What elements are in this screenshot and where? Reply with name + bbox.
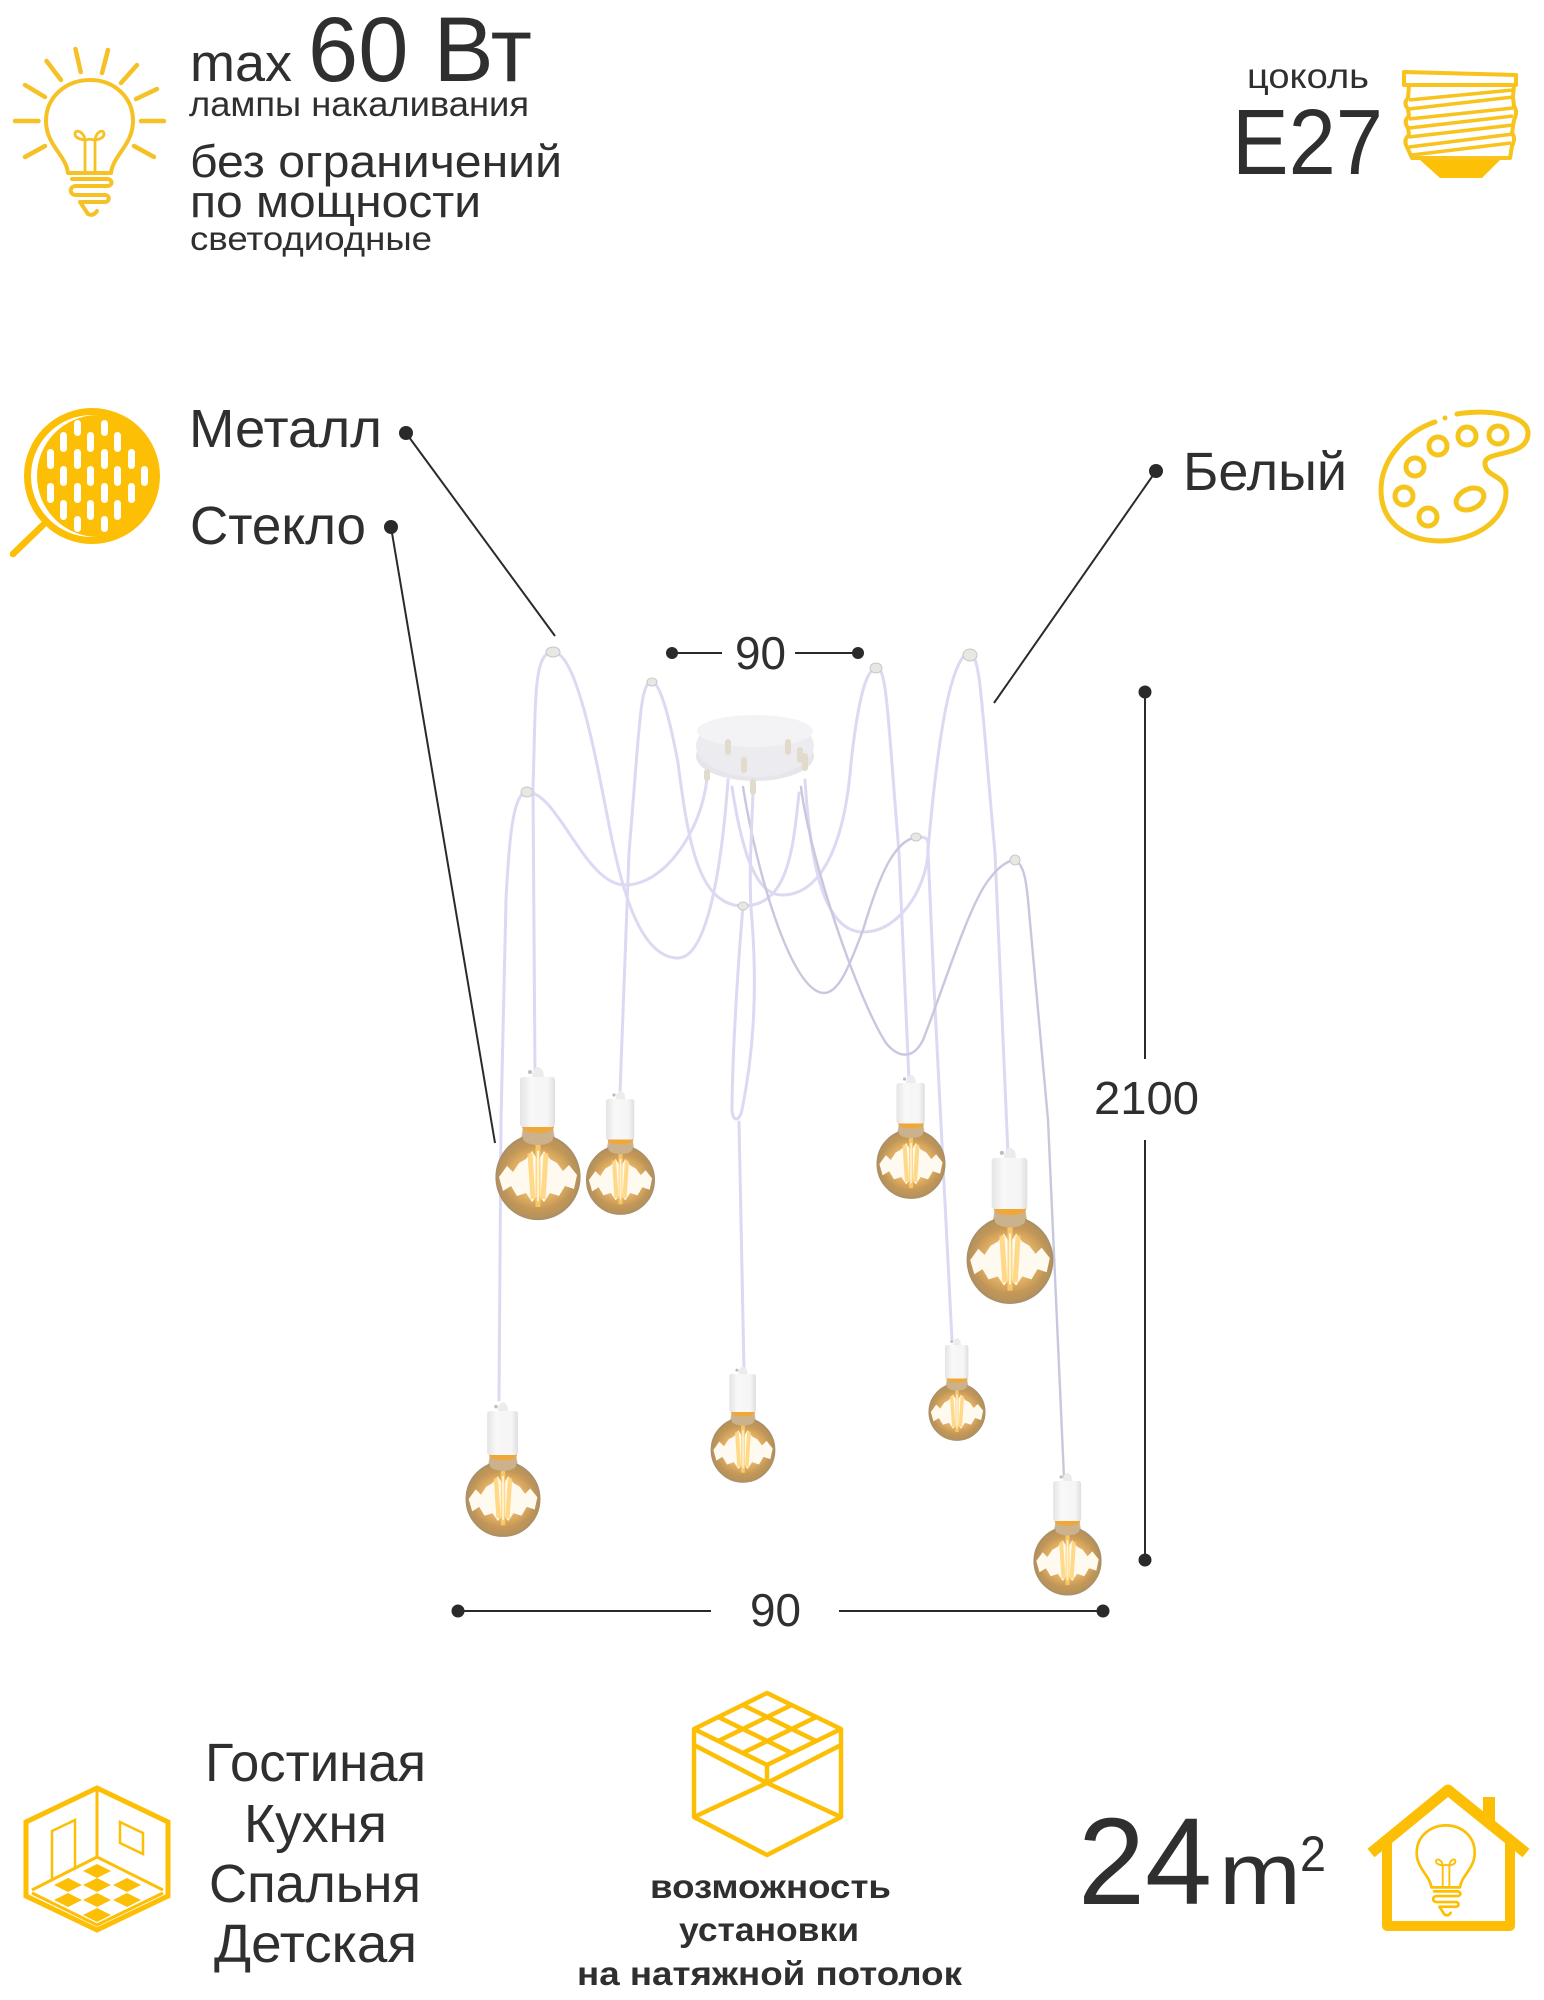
hooks <box>521 647 1020 910</box>
note line 1: возможность <box>650 1868 891 1905</box>
note line 3: на натяжной потолок <box>577 1955 963 1992</box>
socket type: E27 <box>1232 90 1383 194</box>
room: nursery: Детская <box>214 1914 417 1974</box>
leader: glass <box>384 520 495 1143</box>
icon: metal texture under magnifier <box>13 412 159 554</box>
stretch ceiling note <box>577 1868 963 1992</box>
max wattage: 60 Вт <box>308 0 532 101</box>
label: metal: Металл <box>189 399 382 459</box>
heading: power limits <box>189 0 562 257</box>
lamp 3 <box>877 1075 945 1198</box>
area value <box>1078 1794 1326 1931</box>
icon: stretch ceiling box <box>694 1693 841 1855</box>
rooms list <box>205 1733 426 1974</box>
area number: 24 <box>1078 1794 1212 1931</box>
note line 2: установки <box>679 1911 859 1948</box>
max label: max <box>190 34 292 93</box>
dimension: width <box>452 1584 1110 1636</box>
label: white: Белый <box>1183 442 1347 502</box>
dimension: width: 90 <box>750 1584 801 1636</box>
label: glass: Стекло <box>190 496 366 556</box>
area unit: m <box>1219 1824 1301 1923</box>
leader: white <box>994 464 1163 703</box>
icon: house with bulb <box>1371 1790 1526 1926</box>
canopy <box>696 715 814 792</box>
icon: light bulb with rays <box>15 49 164 215</box>
icon: isometric room <box>26 1788 168 1930</box>
lamp 5 <box>466 1402 540 1536</box>
icon: E27 screw base <box>1404 72 1516 178</box>
dimension: height: 2100 <box>1094 1072 1199 1124</box>
dimension: height <box>1094 686 1199 1566</box>
lamp 6 <box>711 1366 775 1482</box>
no limit line 1: без ограничений <box>190 136 562 187</box>
dimension: canopy diameter <box>666 627 864 679</box>
lamp 8 <box>1034 1473 1101 1595</box>
room: living: Гостиная <box>205 1733 426 1793</box>
LED note: светодиодные <box>190 220 432 257</box>
lamp 4 <box>967 1148 1053 1303</box>
lamp 7 <box>929 1338 985 1440</box>
area superscript: 2 <box>1300 1826 1326 1882</box>
leader: metal <box>399 426 555 636</box>
room: bedroom: Спальня <box>209 1854 421 1914</box>
cords <box>499 652 1064 1478</box>
icon: paint palette <box>1381 412 1528 541</box>
lamp 1 <box>496 1067 580 1220</box>
socket label <box>1232 57 1383 194</box>
socket caption: цоколь <box>1247 57 1369 96</box>
incandescent note: лампы накаливания <box>189 85 529 124</box>
chandelier: cords, canopy and lamps <box>466 647 1101 1595</box>
no limit line 2: по мощности <box>190 176 481 227</box>
room: kitchen: Кухня <box>244 1794 387 1854</box>
lamp 2 <box>586 1091 655 1214</box>
dimension: canopy diameter: 90 <box>735 627 786 679</box>
